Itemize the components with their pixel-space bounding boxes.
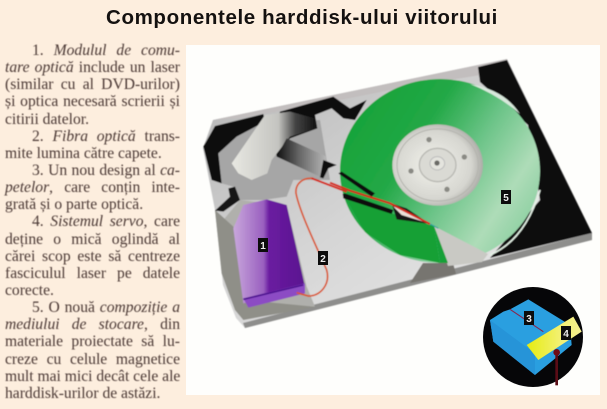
drive bottom edge bbox=[243, 233, 592, 328]
dark wedge bbox=[277, 138, 327, 177]
label 4: 4 bbox=[563, 329, 569, 340]
green disk platter: item 5 bbox=[340, 79, 540, 263]
label 3: 3 bbox=[526, 314, 532, 325]
head arms bbox=[338, 172, 430, 224]
text block: numbered component descriptions: cărei scop este să centreze bbox=[5, 248, 180, 265]
upper grey recess bbox=[218, 120, 330, 200]
drive top rim bbox=[213, 59, 512, 120]
black left band bbox=[203, 114, 265, 183]
text block: numbered component descriptions bbox=[4, 42, 181, 402]
label 1 bbox=[258, 238, 268, 252]
actuator arm bbox=[232, 112, 317, 180]
text block: numbered component descriptions: mult mai mici decât cele ale bbox=[5, 368, 180, 385]
text block: numbered component descriptions: tare optică include un laser bbox=[5, 59, 180, 76]
text block: numbered component descriptions: și optica necesară scrierii și bbox=[5, 93, 180, 110]
text block: numbered component descriptions: citirii datelor. bbox=[5, 111, 89, 128]
laser stem bbox=[553, 355, 561, 385]
text block: numbered component descriptions: deține o mică oglindă al bbox=[5, 231, 180, 248]
label 5: 5 bbox=[503, 193, 509, 204]
disk hub bbox=[392, 124, 483, 206]
label 5 bbox=[501, 190, 511, 204]
label 2: 2 bbox=[320, 254, 326, 265]
black notch bbox=[215, 187, 240, 212]
drive body bbox=[203, 59, 592, 328]
text block: numbered component descriptions: 4. Sistemul servo, care bbox=[32, 213, 180, 230]
text block: numbered component descriptions: corecte. bbox=[5, 282, 54, 299]
hard disk drawing bbox=[203, 59, 592, 328]
text block: numbered component descriptions: petelor, care conțin inte- bbox=[5, 179, 180, 196]
title: Componentele harddisk-ului viitorului bbox=[106, 6, 498, 29]
black corner region bbox=[478, 60, 592, 258]
text block: numbered component descriptions: materiale proiectate să lu- bbox=[5, 333, 180, 350]
label 1: 1 bbox=[260, 241, 266, 252]
inset: head close-up bbox=[483, 287, 583, 387]
cut-away sector under head bbox=[434, 226, 488, 266]
label 2 bbox=[318, 251, 328, 265]
text block: numbered component descriptions: 2. Fibra optică trans- bbox=[32, 128, 180, 145]
purple optical module: item 1 bbox=[233, 199, 305, 308]
text block: numbered component descriptions: mediului de stocare, din bbox=[5, 316, 180, 333]
yellow mirror bbox=[527, 317, 582, 360]
text block: numbered component descriptions: (similar cu al DVD-urilor) bbox=[5, 76, 180, 93]
black top band bbox=[273, 97, 367, 157]
text block: numbered component descriptions: mite lumina către capete. bbox=[5, 145, 162, 162]
left shaded side bbox=[215, 210, 317, 320]
white disc highlight bbox=[470, 84, 520, 114]
blue head block bbox=[490, 299, 572, 375]
text block: numbered component descriptions: harddisk-urilor de astăzi. bbox=[5, 385, 160, 402]
arm stem bbox=[320, 160, 337, 178]
shadow below disc bbox=[410, 263, 456, 283]
text block: numbered component descriptions: fasciculul laser pe datele bbox=[5, 265, 180, 282]
text block: numbered component descriptions: 5. O nouă compoziție a bbox=[32, 299, 180, 316]
text block: numbered component descriptions: 1. Modulul de comu- bbox=[32, 42, 180, 59]
text block: numbered component descriptions: 3. Un nou design al ca- bbox=[32, 162, 180, 179]
red fibre to arm bbox=[312, 178, 347, 192]
red fibre to head bbox=[330, 183, 430, 224]
text block: numbered component descriptions: creze cu celule magnetice bbox=[5, 351, 180, 368]
text block: numbered component descriptions: grată și o parte optică. bbox=[5, 196, 143, 213]
red laser line bbox=[510, 309, 543, 332]
orange fibre: item 2 bbox=[296, 178, 328, 296]
purple module pad bbox=[223, 200, 315, 317]
white panel bbox=[186, 45, 600, 395]
